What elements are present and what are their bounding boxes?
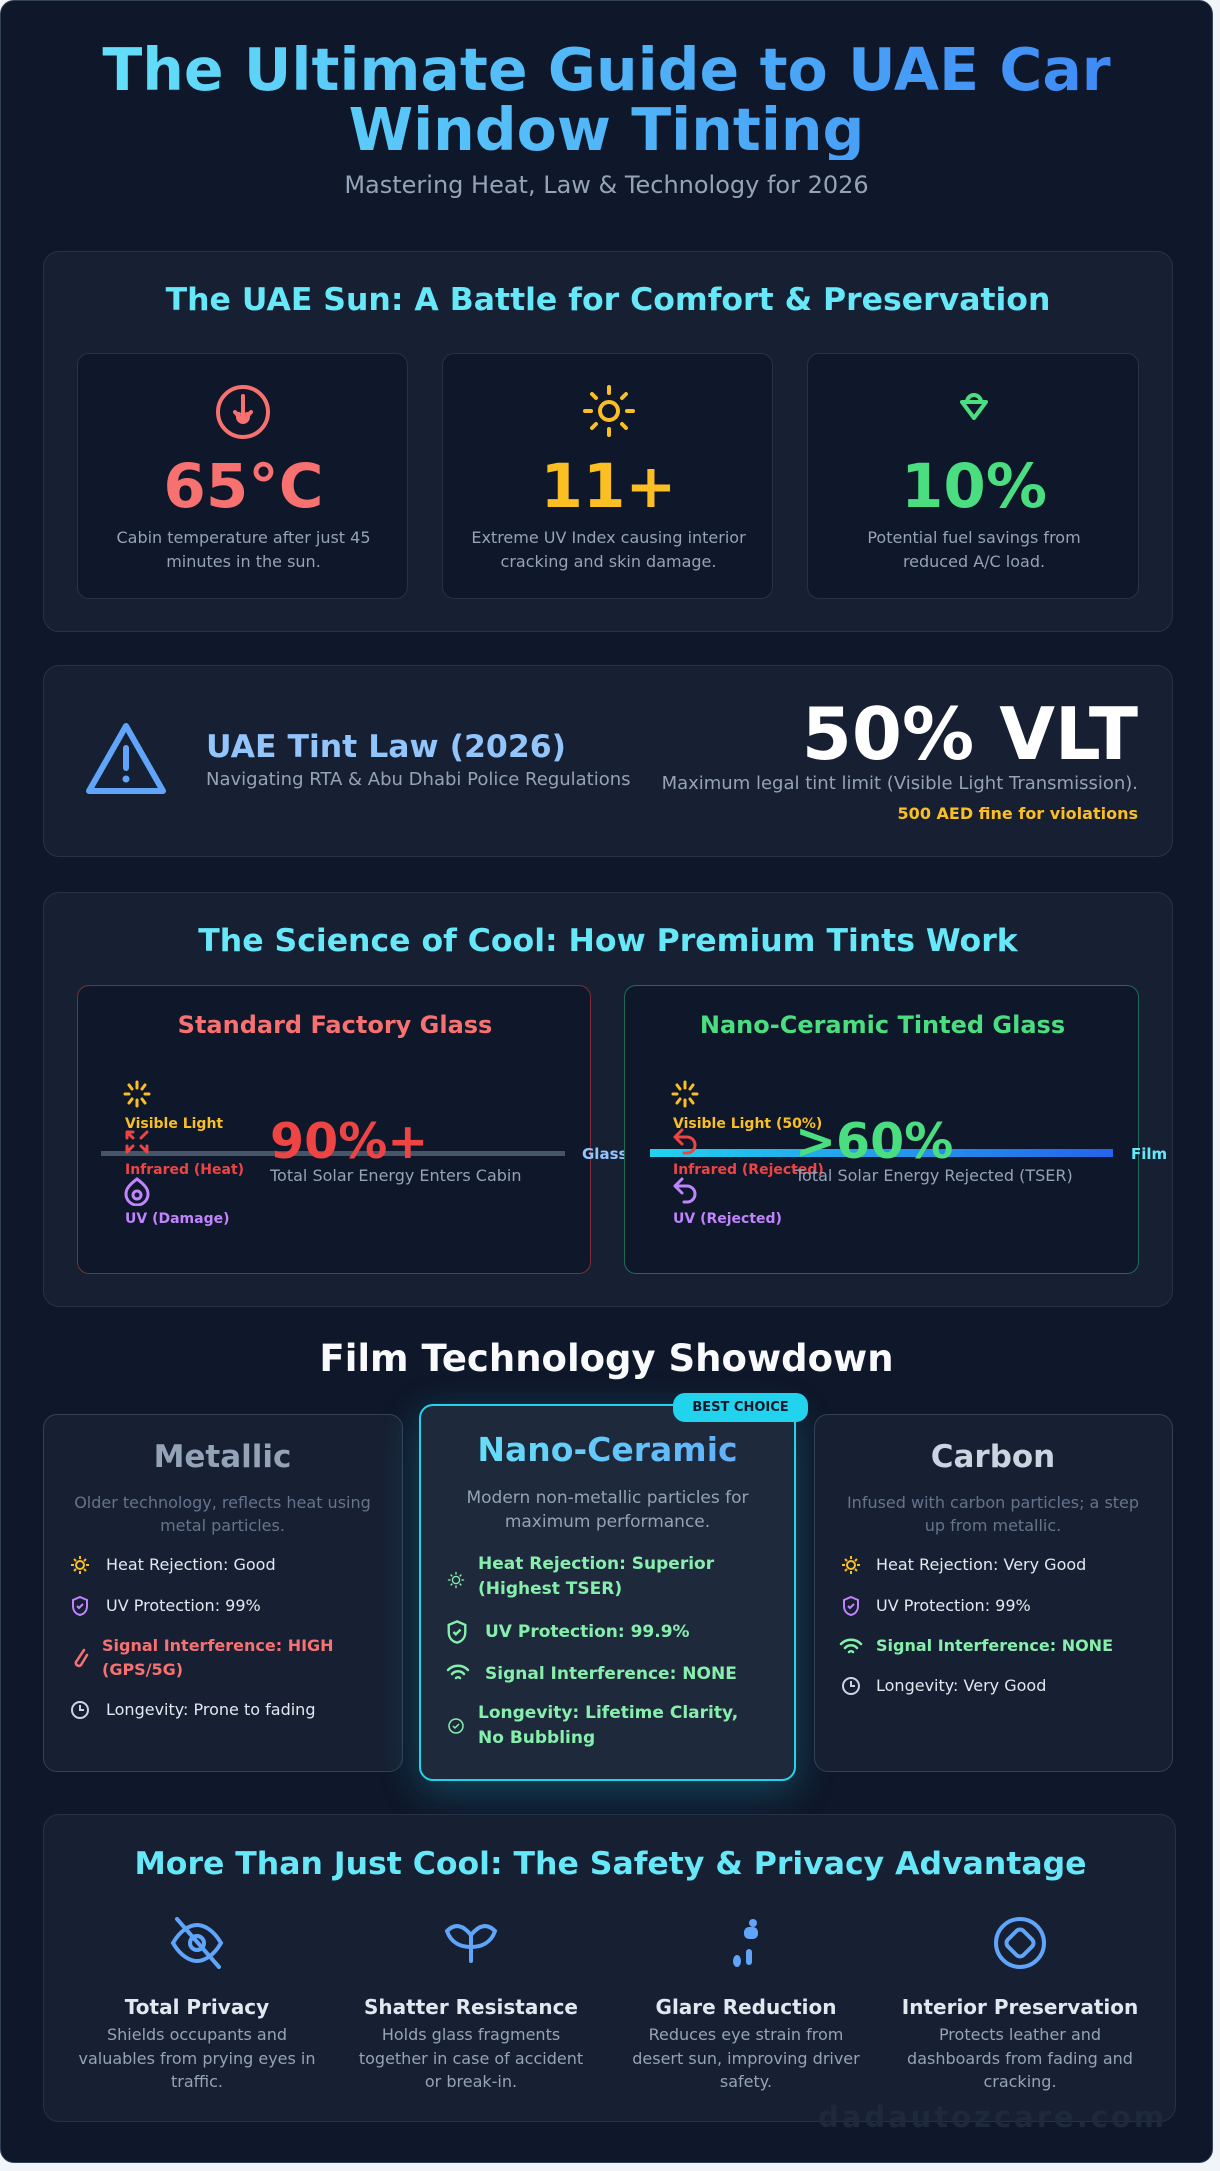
- title: Glare Reduction: [656, 1995, 836, 2019]
- description: reduced A/C load.: [903, 552, 1045, 571]
- check icon: [448, 1718, 464, 1734]
- desc: or break-in.: [425, 2072, 517, 2091]
- description: up from metallic.: [925, 1516, 1061, 1535]
- label: UV: UV (Damage): [125, 1211, 230, 1227]
- item: privacy: [78, 1916, 316, 2091]
- shield icon: [72, 1596, 88, 1616]
- item: interior: [885, 1915, 1155, 2105]
- sun icon: [448, 1572, 464, 1588]
- description: [116, 528, 371, 571]
- subtitle: Mastering Heat, Law & Technology for 2026: [344, 171, 869, 199]
- features: Signal Interference: HIGH: [102, 1636, 334, 1655]
- features: [71, 1555, 334, 1719]
- description: [867, 528, 1081, 571]
- heading: UAE sun: The UAE Sun: A Battle for Comfort & Preservation: [166, 282, 1050, 318]
- features: Heat Rejection: Superior: [478, 1554, 714, 1574]
- stat card: 65C: [77, 353, 408, 599]
- glass label: Glass: [582, 1145, 627, 1163]
- icon: UV: [124, 1177, 150, 1206]
- heading: showdown: Film Technology Showdown: [319, 1337, 894, 1380]
- icon: sun: [583, 385, 635, 437]
- law subtitle: Navigating RTA & Abu Dhabi Police Regulations: [206, 769, 631, 790]
- description: Potential fuel savings from: [867, 528, 1081, 547]
- card: carbon: [814, 1414, 1173, 1772]
- title: Metallic: [154, 1439, 291, 1475]
- glass line: [101, 1151, 565, 1156]
- desc: [632, 2025, 860, 2091]
- law title: UAE Tint Law (2026): [206, 729, 566, 765]
- icon: warning: [86, 723, 166, 794]
- desc: safety.: [720, 2072, 772, 2091]
- description: [466, 1488, 749, 1532]
- panel: science: [43, 892, 1173, 1307]
- description: maximum performance.: [505, 1512, 710, 1532]
- description: [471, 528, 746, 571]
- desc: Holds glass fragments: [382, 2025, 560, 2044]
- card: metallic: [43, 1414, 403, 1772]
- title: Window Tinting: [349, 96, 864, 164]
- icon: infrared: [125, 1130, 149, 1154]
- icon: leaf/drop: [960, 393, 988, 420]
- stat card: UV: [442, 353, 773, 599]
- desc: Shields occupants and: [107, 2025, 287, 2044]
- title: Nano-Ceramic: [477, 1430, 738, 1469]
- VLT description: Maximum legal tint limit (Visible Light Transmission).: [662, 773, 1138, 794]
- desc: cracking.: [983, 2072, 1057, 2091]
- fine note: 500 AED fine for violations: [898, 804, 1138, 823]
- description: metal particles.: [160, 1516, 285, 1535]
- features: Signal Interference: NONE: [485, 1664, 737, 1684]
- description: [847, 1493, 1139, 1535]
- icon: droplets: [733, 1919, 758, 1967]
- title: Interior Preservation: [902, 1995, 1138, 2019]
- panel: safety & privacy: [43, 1814, 1176, 2122]
- features: Longevity: Prone to fading: [106, 1700, 315, 1719]
- stat caption: Total Solar Energy Enters Cabin: [270, 1166, 522, 1185]
- description: Older technology, reflects heat using: [74, 1493, 371, 1512]
- panel: tint law: [43, 665, 1173, 857]
- title: Carbon: [931, 1439, 1055, 1475]
- panel: UAE sun: [43, 251, 1173, 632]
- subheading: Standard Factory Glass: [178, 1011, 492, 1039]
- big stat 60%: >60%: [795, 1113, 953, 1170]
- desc: [885, 2023, 1155, 2094]
- features: UV Protection: 99.9%: [485, 1622, 690, 1642]
- film bar: [650, 1149, 1113, 1157]
- features: UV Protection: 99%: [106, 1596, 261, 1615]
- title: [421, 1430, 794, 1470]
- watermark: dadautozcare.com: [818, 2100, 1167, 2134]
- desc: valuables from prying eyes in: [78, 2048, 316, 2068]
- features: Longevity: Very Good: [876, 1676, 1046, 1695]
- badge: best choice: [673, 1393, 808, 1422]
- description: Modern non-metallic particles for: [466, 1488, 749, 1508]
- big stat 90%: 90%+: [270, 1113, 428, 1170]
- heading: science: The Science of Cool: How Premium Tints Work: [198, 923, 1018, 959]
- title: Shatter Resistance: [364, 1995, 578, 2019]
- sun icon: [71, 1556, 89, 1574]
- number: 11+: [540, 451, 676, 522]
- desc: desert sun, improving driver: [632, 2048, 860, 2068]
- icon: eye off: [170, 1916, 224, 1970]
- desc: Reduces eye strain from: [649, 2025, 843, 2044]
- desc: traffic.: [171, 2072, 223, 2091]
- card: nano-ceramic (best): [419, 1404, 796, 1781]
- big VLT number: 50% VLT: [802, 692, 1138, 776]
- icon: shield lips: [444, 1924, 498, 1963]
- label: visible 50%: Visible Light (50%): [673, 1116, 822, 1132]
- shield icon: [448, 1620, 466, 1644]
- icon: IR rejected: [673, 1128, 696, 1154]
- sun icon: [842, 1556, 860, 1574]
- wifi icon: [446, 1664, 470, 1680]
- features: Longevity: Lifetime Clarity,: [478, 1703, 738, 1723]
- icon: visible light: [124, 1080, 150, 1108]
- subheading: Nano-Ceramic Tinted Glass: [700, 1011, 1065, 1039]
- number: 10%: [901, 451, 1047, 522]
- shield icon: [843, 1596, 859, 1616]
- stat caption: Total Solar Energy Rejected (TSER): [795, 1166, 1073, 1185]
- box: standard glass: [77, 985, 591, 1274]
- description: Infused with carbon particles; a step: [847, 1493, 1139, 1512]
- clip icon: [74, 1648, 88, 1668]
- heading: More Than Just Cool: The Safety & Privacy Advantage: [134, 1846, 1087, 1882]
- description: cracking and skin damage.: [501, 552, 716, 571]
- item: glare: [632, 1919, 860, 2091]
- features: (GPS/5G): [102, 1660, 183, 1679]
- label: IR rejected: Infrared (Rejected): [673, 1162, 824, 1178]
- label: UV rejected: UV (Rejected): [673, 1211, 782, 1227]
- features: (Highest TSER): [478, 1579, 622, 1599]
- description: Extreme UV Index causing interior: [471, 528, 746, 547]
- label: infrared: Infrared (Heat): [125, 1162, 244, 1178]
- stat card: fuel: [807, 353, 1139, 599]
- title: [0, 40, 1213, 160]
- description: minutes in the sun.: [166, 552, 321, 571]
- box: nano ceramic: [624, 985, 1139, 1274]
- features: [446, 1554, 738, 1748]
- desc: dashboards from fading and: [907, 2048, 1133, 2068]
- features: [840, 1555, 1113, 1695]
- features: No Bubbling: [478, 1728, 595, 1748]
- label: visible light: Visible Light: [125, 1116, 223, 1132]
- desc: Protects leather and: [939, 2025, 1101, 2044]
- clock icon: [842, 1677, 860, 1695]
- clock icon: [71, 1701, 89, 1719]
- title: Total Privacy: [125, 1995, 269, 2019]
- icon: circle diamond: [992, 1915, 1048, 1971]
- features: Signal Interference: NONE: [876, 1636, 1113, 1655]
- features: Heat Rejection: Good: [106, 1555, 276, 1574]
- icon: thermometer: [216, 385, 270, 439]
- badge: best choice: BEST CHOICE: [692, 1400, 789, 1415]
- film label: Film: [1131, 1145, 1167, 1163]
- features: UV Protection: 99%: [876, 1596, 1031, 1615]
- item: shatter: [359, 1924, 583, 2091]
- title: The Ultimate Guide to UAE Car: [102, 36, 1111, 104]
- description: [74, 1493, 371, 1535]
- desc: [359, 2025, 583, 2091]
- description: Cabin temperature after just 45: [116, 528, 371, 547]
- desc: together in case of accident: [359, 2048, 583, 2068]
- features: Heat Rejection: Very Good: [876, 1555, 1086, 1574]
- icon: visible light 2: [672, 1080, 698, 1108]
- icon: UV rejected: [673, 1177, 696, 1204]
- desc: [78, 2025, 316, 2091]
- wifi icon: [840, 1638, 862, 1654]
- number: 65°C: [163, 451, 324, 522]
